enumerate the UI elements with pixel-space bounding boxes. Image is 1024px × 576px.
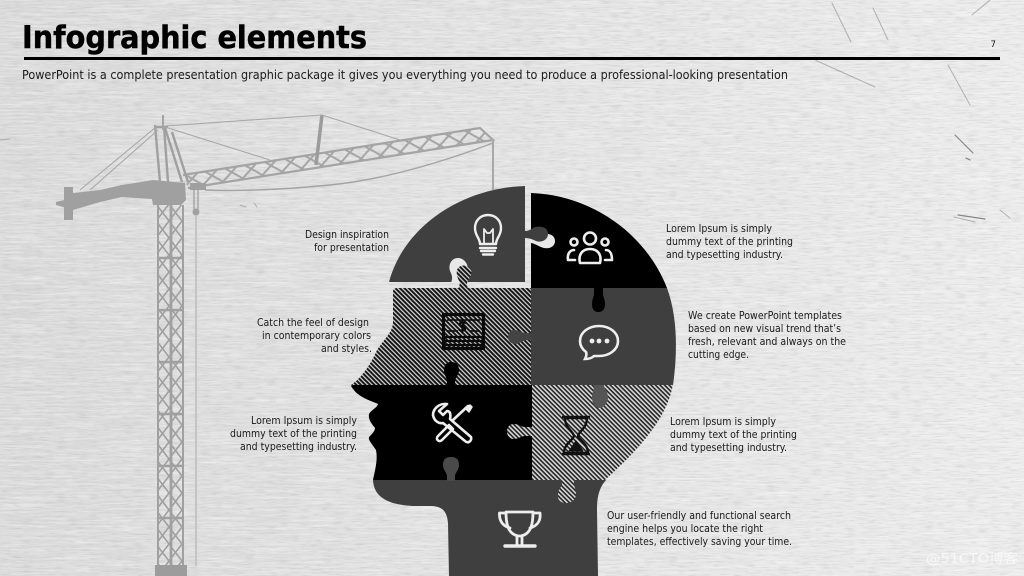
piece: face black — [351, 385, 533, 481]
knob: hatch into neck — [558, 478, 576, 503]
label: catch the feel: and styles. — [321, 343, 372, 355]
label: we create templates: cutting edge. — [688, 349, 749, 361]
crane silhouette — [56, 115, 493, 576]
crane counter jib and head — [56, 115, 493, 566]
label: we create templates: based on new visual trend that’s — [688, 323, 841, 335]
knob: grey into black — [443, 457, 459, 481]
label: search engine: Our user-friendly and functional search — [607, 510, 791, 522]
label: design inspiration: Design inspiration — [305, 229, 389, 241]
label: lorem lower right: Lorem Ipsum is simply — [670, 416, 776, 428]
label: lorem lower right: dummy text of the printing — [670, 429, 797, 441]
knob: hatch into grey — [457, 266, 471, 290]
icon: hourglass — [562, 417, 590, 454]
label: design inspiration — [305, 229, 389, 254]
title rule — [24, 57, 1000, 60]
piece: top left grey — [389, 186, 548, 290]
page number: 7 — [990, 40, 996, 50]
label: lorem top right: dummy text of the printing — [666, 236, 793, 248]
title: Infographic elements — [22, 20, 367, 56]
piece: top right black — [530, 193, 667, 288]
label: lorem left — [230, 415, 357, 453]
watermark: @51CTO博客 — [926, 551, 1018, 567]
knob: black into hatch — [444, 362, 459, 386]
label: catch the feel — [257, 317, 372, 355]
label: lorem top right: Lorem Ipsum is simply — [666, 223, 772, 235]
piece: middle left hatch — [351, 288, 532, 386]
label: search engine: engine helps you locate the right — [607, 523, 763, 535]
icon: banknote: $ — [458, 319, 467, 335]
label: lorem left: Lorem Ipsum is simply — [251, 415, 357, 427]
knob: black into grey — [592, 287, 605, 312]
piece: middle right grey — [531, 287, 676, 385]
knob: gap into grey — [449, 258, 468, 283]
icon: tools — [433, 404, 472, 442]
crane mast — [155, 205, 187, 576]
label: lorem left: and typesetting industry. — [240, 441, 357, 453]
label: we create templates: fresh, relevant and always on the — [688, 336, 846, 348]
head puzzle — [351, 186, 676, 576]
icon: trophy — [499, 512, 540, 546]
label: lorem lower right — [670, 416, 797, 454]
label: lorem top right: and typesetting industry. — [666, 249, 783, 261]
crane jib — [183, 128, 493, 188]
label: lorem left: dummy text of the printing — [230, 428, 357, 440]
knob: grey into hatch — [508, 330, 532, 344]
knob: hatch into black — [507, 424, 533, 439]
knob: grey into lower right — [592, 383, 608, 408]
label: search engine: templates, effectively saving your time. — [607, 536, 792, 548]
subtitle: PowerPoint is a complete presentation graphic package it gives you everything you need to produce a professional-looking presentation — [22, 68, 788, 82]
label: design inspiration: for presentation — [314, 242, 389, 254]
label: lorem top right — [666, 223, 793, 261]
icon: banknote — [444, 314, 484, 348]
icon: light bulb — [475, 215, 501, 254]
label: lorem lower right: and typesetting industry. — [670, 442, 787, 454]
knob: gap into black — [530, 234, 555, 248]
label: catch the feel: Catch the feel of design — [257, 317, 369, 329]
label: we create templates: We create PowerPoint templates — [688, 310, 842, 322]
piece: neck bottom — [373, 478, 606, 576]
piece: lower right hatch — [531, 383, 673, 480]
label: we create templates — [688, 310, 846, 361]
icon: speech bubble — [580, 326, 618, 359]
icon: people — [568, 232, 612, 263]
label: catch the feel: in contemporary colors — [262, 330, 371, 342]
label: search engine — [607, 510, 792, 548]
